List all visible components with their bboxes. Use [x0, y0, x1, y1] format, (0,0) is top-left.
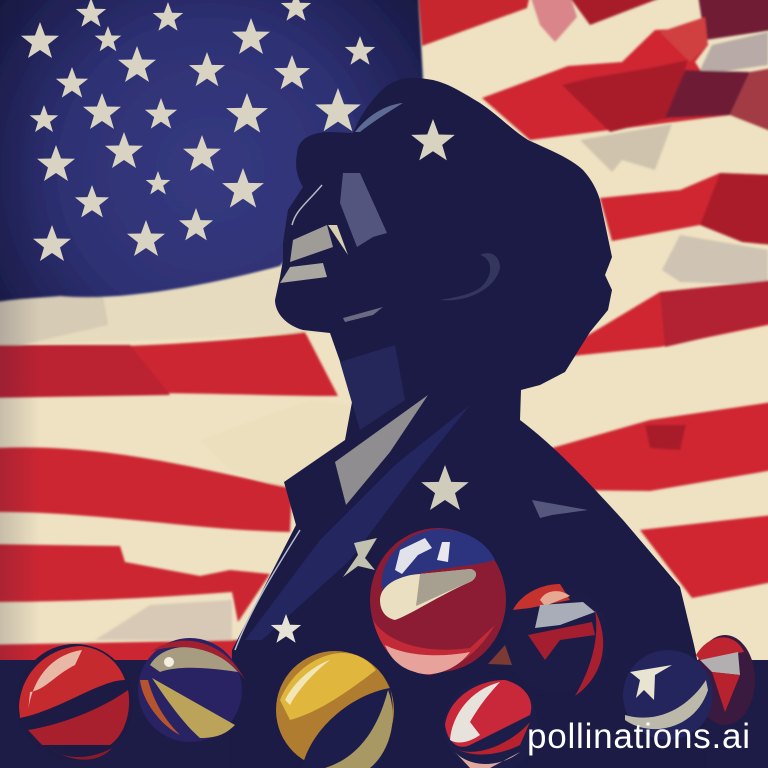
red stripes: left — [0, 332, 338, 665]
star on lapel — [343, 538, 377, 577]
star on sleeve — [271, 614, 301, 643]
cap band — [355, 103, 403, 132]
large flag ball — [370, 528, 506, 675]
purple and tan ball — [138, 638, 245, 742]
face highlights — [280, 173, 387, 322]
neck shadow — [340, 345, 405, 430]
red ball bottom left — [17, 644, 133, 760]
watermark: pollinations.ai — [527, 717, 750, 756]
canton — [0, 0, 423, 303]
yellow ball — [276, 651, 394, 768]
collar — [335, 395, 428, 505]
stars on canton — [21, 0, 375, 261]
left edge shadow — [0, 0, 40, 660]
cream shading — [0, 32, 768, 640]
star on head — [411, 119, 455, 160]
red and white ball — [444, 679, 538, 768]
bottom dark band — [0, 660, 768, 768]
red stripes: right — [545, 173, 768, 598]
far-right red ball — [695, 635, 755, 725]
silhouette of person — [230, 78, 706, 768]
star on chest — [421, 465, 469, 510]
white star ball — [623, 650, 713, 740]
red stripes: upper right — [418, 0, 768, 140]
star on shoulder — [532, 500, 588, 518]
head and torso — [230, 78, 706, 768]
lapel white line — [235, 530, 300, 650]
right flag ball — [488, 584, 610, 696]
ear — [440, 253, 500, 300]
jacket panel — [245, 405, 470, 640]
